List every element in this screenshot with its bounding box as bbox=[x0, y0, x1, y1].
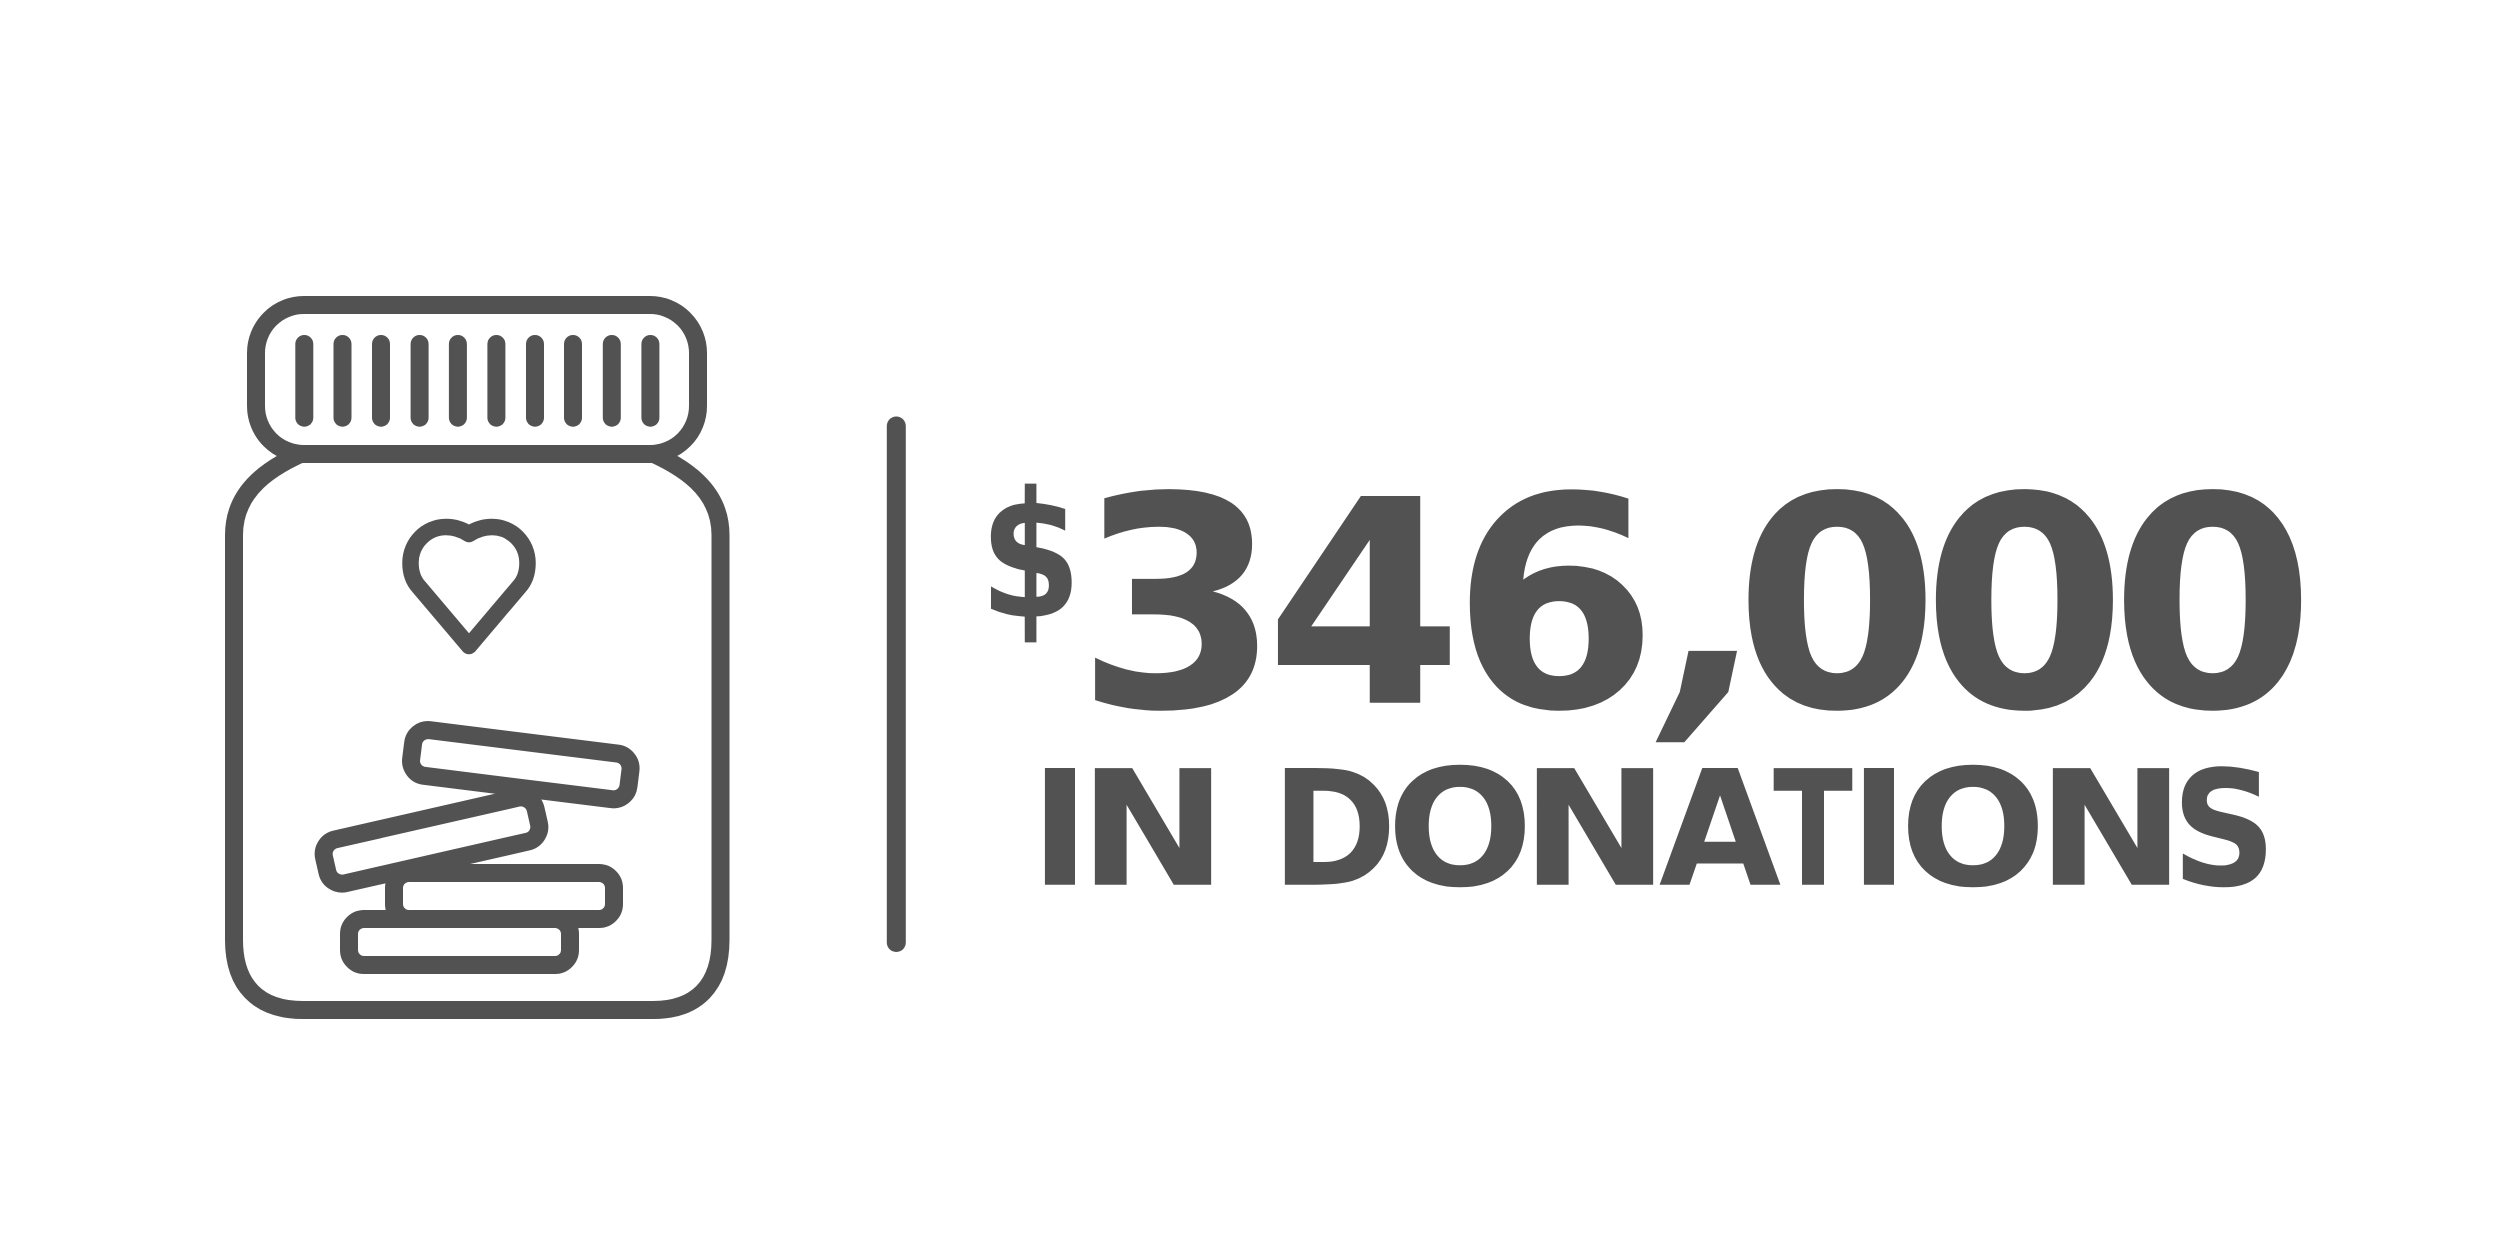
caption: in donations: S bbox=[2171, 738, 2277, 924]
digit 0: 0 bbox=[2110, 436, 2315, 776]
caption: in donations: I bbox=[1030, 736, 1090, 923]
coin 4 bbox=[349, 919, 570, 965]
donation amount bbox=[979, 435, 2315, 776]
caption: in donations: A bbox=[1659, 737, 1781, 923]
digit 6: 6 bbox=[1451, 435, 1659, 776]
caption: in donations: N bbox=[1521, 736, 1669, 923]
caption: in donations bbox=[1030, 734, 2277, 924]
comma: , bbox=[1635, 447, 1809, 768]
icon: donation jar bbox=[234, 305, 720, 1010]
digit 0: 0 bbox=[1922, 436, 2127, 776]
digit 0: 0 bbox=[1734, 436, 1940, 776]
icon: heart bbox=[410, 527, 528, 646]
vertical divider bbox=[887, 426, 906, 942]
jar lid bbox=[256, 305, 698, 454]
caption: in donations: I bbox=[1849, 736, 1909, 923]
coin 1 bbox=[409, 728, 632, 801]
jar body bbox=[234, 449, 720, 1010]
caption: in donations: D bbox=[1271, 736, 1397, 923]
coin 3 bbox=[394, 873, 614, 919]
caption: in donations: N bbox=[2037, 736, 2185, 923]
caption: in donations: T bbox=[1773, 737, 1853, 924]
lid ridges bbox=[304, 344, 650, 418]
digit 4: 4 bbox=[1265, 440, 1463, 770]
icon: stack of coins bbox=[321, 728, 632, 965]
caption: in donations: O bbox=[1899, 734, 2047, 924]
coin 2 bbox=[321, 794, 542, 887]
caption: in donations: N bbox=[1079, 736, 1227, 923]
caption: in donations: O bbox=[1386, 734, 1534, 924]
digit 3: 3 bbox=[1075, 436, 1281, 776]
dollar sign: $ bbox=[979, 455, 1082, 659]
